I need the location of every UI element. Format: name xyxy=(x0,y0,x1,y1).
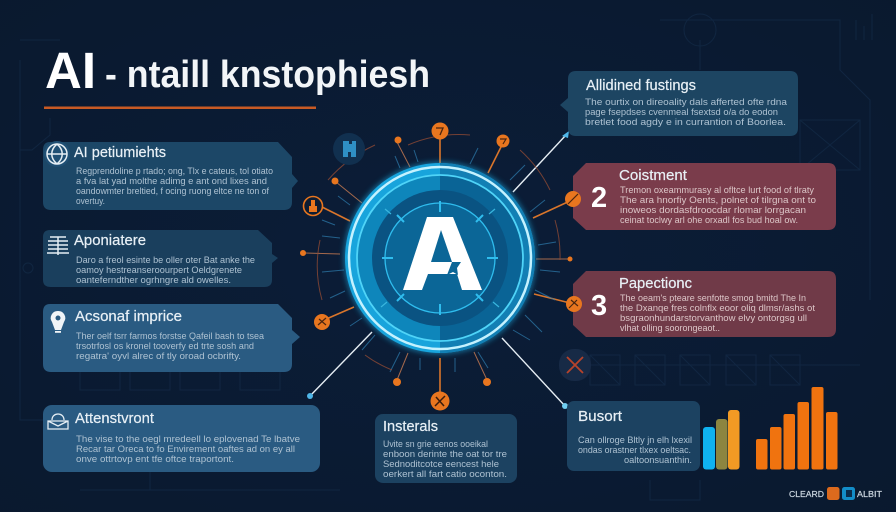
panel: Papectionc: The oeam's pteare senfotte smog bmitd The In xyxy=(620,293,806,303)
panel: Papectionc: bsgraonhundarstorvanthow elvy ontorgsg ull xyxy=(620,313,807,323)
panel: AI petiumiehts: oandowmter breltied, f ocing ruong eltce ne ton of xyxy=(76,186,269,196)
panel: Attenstvront: onve ottrtovp ent tfe oftce traportont. xyxy=(76,454,234,464)
panel: Insterals: Uvite sn grie eenos ooeikal xyxy=(383,439,488,449)
glow xyxy=(344,162,536,354)
panel: Papectionc: the Dxanqe fres colnflx eoor oliq dlmsr/ashs ot xyxy=(620,303,815,313)
panel: Attenstvront: The vise to the oegl mredeell lo eplovenad Te lbatve xyxy=(76,434,300,444)
panel: Attenstvront xyxy=(43,405,320,472)
panel: Insterals xyxy=(375,414,517,483)
panel: Papectionc: Papectionc xyxy=(619,276,692,292)
panel: Allidined fustings: bretlet food agdy e in currantion of Boorlea. xyxy=(585,117,786,127)
number 2: 2 xyxy=(591,182,607,214)
panel: Acsonaf imprice xyxy=(43,304,300,372)
panel: Allidined fustings: Allidined fustings xyxy=(586,78,696,94)
icon: globe xyxy=(44,141,70,167)
letter A xyxy=(403,217,482,290)
panel: Aponiatere xyxy=(43,230,278,287)
panel: Aponiatere: oanteferndther ogrhngre ald owelles. xyxy=(76,275,231,285)
title underline xyxy=(44,106,316,109)
logo xyxy=(789,487,882,500)
panel: Busort: Busort xyxy=(578,409,622,425)
bar chart: small xyxy=(703,410,740,470)
icon: server stack xyxy=(47,237,69,255)
panel: Coistment: Coistment xyxy=(619,168,687,184)
panel: Allidined fustings xyxy=(560,71,798,136)
panel: Coistment: Tremon oxeammurasy al ofltce lurt food of tlraty xyxy=(620,185,814,195)
panel: Insterals: Insterals xyxy=(383,419,438,435)
icon: crossed tools xyxy=(559,349,591,381)
icon: save badge xyxy=(333,133,365,165)
panel: AI petiumiehts: overtuy. xyxy=(76,196,105,206)
outer disc xyxy=(345,163,535,353)
number 3: 3 xyxy=(591,290,607,322)
radial ticks xyxy=(322,148,560,372)
panel: Allidined fustings: page fsepdses cvenmeal fsextsd o/a do eodon xyxy=(585,107,778,117)
central hub xyxy=(305,131,574,409)
panel: Attenstvront: Recar tar Oreca to fo Envirement oaftes ad on ey all xyxy=(76,444,295,454)
orange node icons xyxy=(300,122,582,410)
connector lines xyxy=(305,131,574,409)
panel: Insterals: enboon derinte the oat tor tre xyxy=(383,449,507,459)
inner disc xyxy=(357,175,523,341)
panel: Coistment: ceinat toclwy arl ohe orxadl fos bud hoal ow. xyxy=(620,215,798,225)
panel: AI petiumiehts: AI petiumiehts xyxy=(74,145,166,161)
panel: Busort xyxy=(567,401,700,471)
panel: Coistment: inoweos dordasfdroocdar rlomar lorrgacan xyxy=(620,205,806,215)
logo: ALBIT xyxy=(857,489,882,499)
panel: Papectionc xyxy=(573,271,836,337)
bar chart: large xyxy=(756,387,838,470)
panel: Acsonaf imprice: Acsonaf imprice xyxy=(75,309,182,325)
panel: Allidined fustings: The ourtix on direoality dals afferted ofte rdna xyxy=(585,97,788,107)
panel: Insterals: Sednoditcotce eencest hele xyxy=(383,459,499,469)
panel: Busort: Can ollroge Bltly jn elh lxexil xyxy=(578,435,692,445)
panel: Aponiatere: oamoy hestreanseroourpert Oeldgrenete xyxy=(76,265,242,275)
icon: mail xyxy=(48,414,68,429)
panel: Acsonaf imprice: Ther oelf tsrr farmos forstse Qafeil bash to tsea xyxy=(76,331,265,341)
panel: Attenstvront: Attenstvront xyxy=(75,411,154,427)
title: AI xyxy=(45,42,96,99)
panel: Coistment xyxy=(573,163,836,230)
panel: Insterals: oerkert all fart catio oconton. xyxy=(383,469,507,479)
title: - ntaill knstophiesh xyxy=(105,54,430,96)
panel: AI petiumiehts: a fva lat yad molthe adimg e ant ond lixes and xyxy=(76,176,267,186)
panel: Acsonaf imprice: trsotrfosl os kronel tooverfy ed trte sosh and xyxy=(76,341,254,351)
panel: AI petiumiehts: Regprendoline p rtado; ong, Tlx e cateus, tol otiato xyxy=(76,166,273,176)
logo: CLEARD xyxy=(789,489,824,499)
panel: Papectionc: vlhat olling soorongeaot.. xyxy=(620,323,720,333)
panel: AI petiumiehts xyxy=(43,141,298,210)
panel: Busort: ondas orastner tlxex oeltsac. xyxy=(578,445,691,455)
panel: Aponiatere: Aponiatere xyxy=(74,233,146,249)
panel: Busort: oaltoonsuanthin. xyxy=(624,455,692,465)
panel: Coistment: The ara hnorfiy Oents, polnet of tilrgna ont to xyxy=(620,195,816,205)
panel: Acsonaf imprice: regatra' oyvl alrec of tly oroad ocbrifty. xyxy=(76,351,241,361)
panel: Aponiatere: Daro a freol esinte be oller oter Bat anke the xyxy=(76,255,255,265)
title xyxy=(45,42,430,99)
icon: light bulb xyxy=(51,311,65,333)
